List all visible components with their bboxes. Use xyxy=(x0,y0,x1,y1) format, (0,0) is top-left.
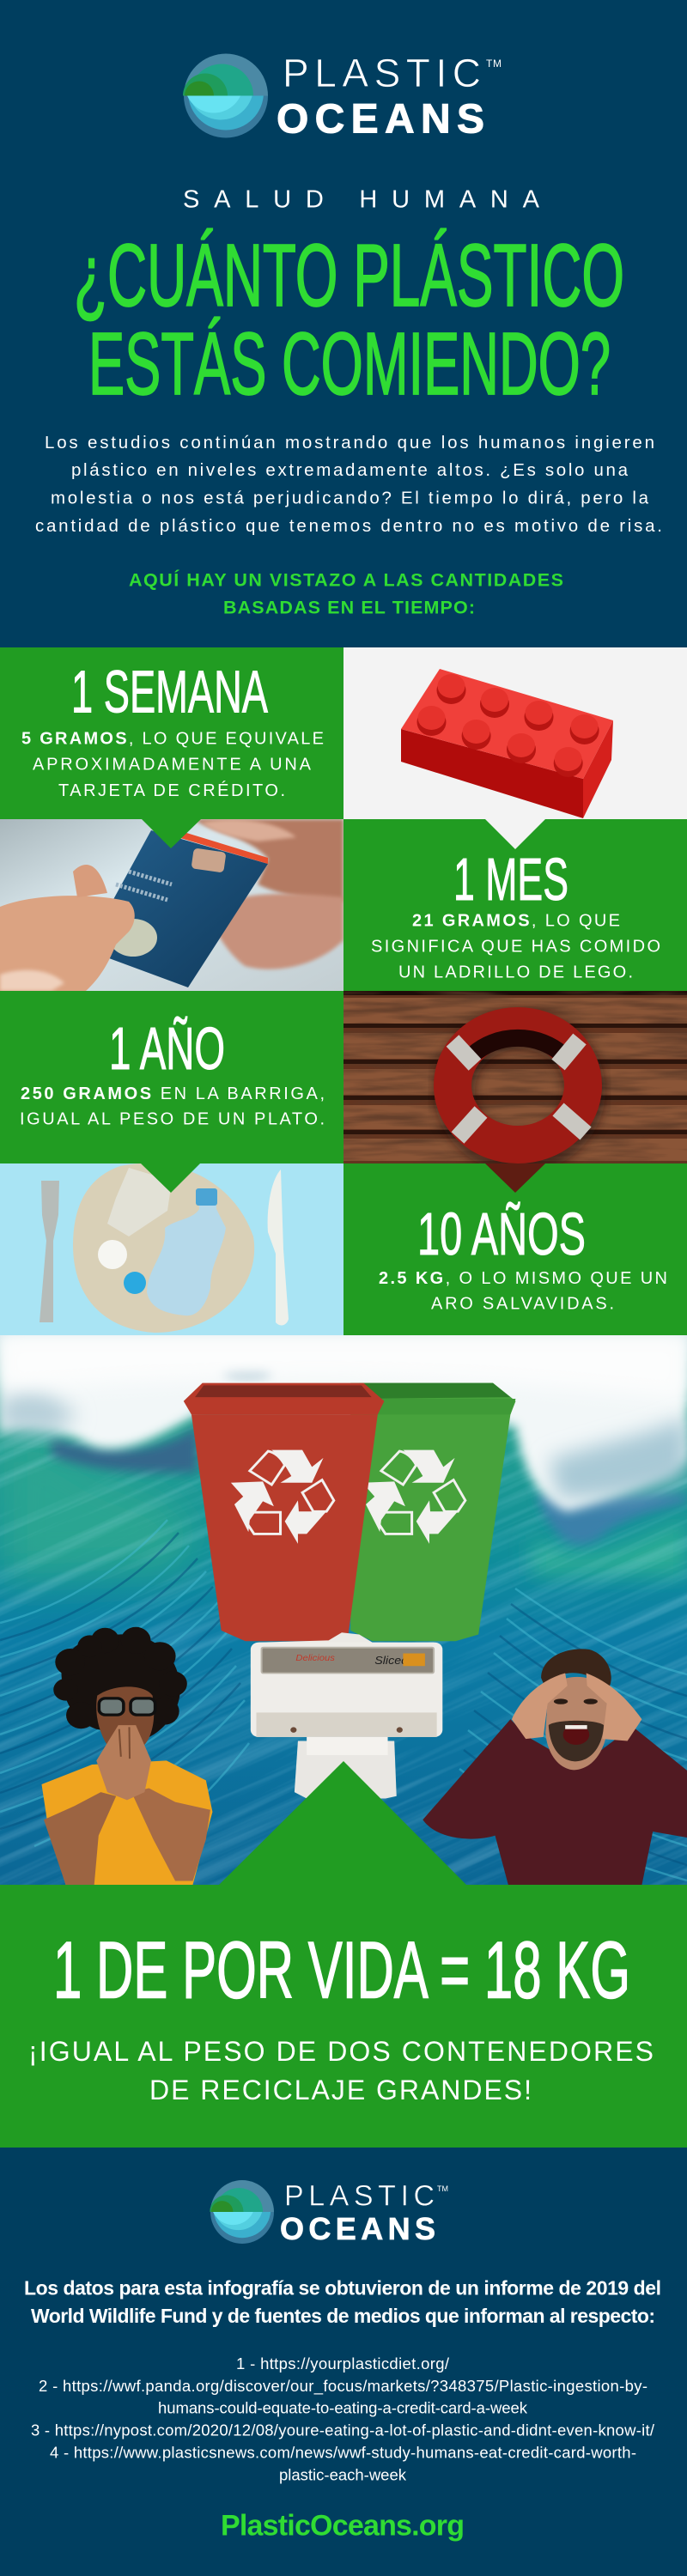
body xyxy=(379,1269,667,1314)
intro text: plástico en niveles extremadamente altos. ¿Es solo una xyxy=(71,460,629,480)
left hand xyxy=(0,896,135,991)
heading: 1 AÑO xyxy=(109,1015,225,1082)
source links: 2 - https://wwf.panda.org/discover/our_focus/markets/?348375/Plastic-ingestion-by- xyxy=(39,2377,647,2396)
knife xyxy=(268,1170,289,1325)
man xyxy=(423,1649,687,1885)
subheading: AQUÍ HAY UN VISTAZO A LAS CANTIDADES xyxy=(129,568,563,591)
logo: Plastic Oceans xyxy=(183,51,502,143)
heading: 1 MES xyxy=(453,846,568,913)
title xyxy=(74,226,624,413)
panel: 10 años xyxy=(344,1163,687,1335)
body: TARJETA DE CRÉDITO. xyxy=(58,781,285,800)
logo wordmark: OCEANS xyxy=(277,96,484,143)
body: ¡IGUAL AL PESO DE DOS CONTENEDORES xyxy=(28,2036,654,2067)
heading: 1 SEMANA xyxy=(71,658,268,725)
photo: lego brick xyxy=(344,647,687,819)
neck and head xyxy=(545,1677,607,1770)
body: 2.5 KG, O LO MISMO QUE UN xyxy=(379,1269,667,1288)
body: IGUAL AL PESO DE UN PLATO. xyxy=(20,1109,325,1128)
notch xyxy=(142,819,201,848)
mouth xyxy=(563,1724,589,1745)
red bin xyxy=(184,1383,384,1641)
green triangle xyxy=(219,1761,466,1885)
wave strands xyxy=(0,1520,687,1880)
notch xyxy=(141,1163,200,1193)
logo: Plastic Oceans small xyxy=(210,2179,448,2246)
hands xyxy=(512,1673,568,1739)
data source text xyxy=(24,2277,661,2327)
plate xyxy=(73,1163,254,1333)
eyes xyxy=(554,1698,598,1704)
body: DE RECICLAJE GRANDES! xyxy=(149,2075,532,2105)
panel: 1 año xyxy=(0,991,344,1193)
logo wordmark: PLASTIC xyxy=(283,51,481,95)
source links: 4 - https://www.plasticsnews.com/news/wwf-study-humans-eat-credit-card-worth- xyxy=(50,2444,636,2461)
source links xyxy=(31,2354,655,2483)
hair xyxy=(541,1649,611,1698)
shirt xyxy=(41,1760,212,1885)
subheading xyxy=(129,568,563,618)
panel: 1 semana xyxy=(0,647,344,848)
notch xyxy=(485,819,545,849)
photo: plate with plastic xyxy=(0,1163,344,1335)
header background xyxy=(0,0,687,647)
website: PlasticOceans.org xyxy=(221,2509,465,2542)
panel: footer xyxy=(26,2180,660,2542)
body: SIGNIFICA QUE HAS COMIDO xyxy=(371,938,660,957)
card xyxy=(110,830,268,987)
slicer machine: Delicious xyxy=(295,1653,336,1663)
bottle xyxy=(147,1206,226,1315)
icon: recycle xyxy=(362,1450,465,1544)
data source text: Los datos para esta infografía se obtuvieron de un informe de 2019 del xyxy=(24,2277,661,2300)
body: 250 GRAMOS EN LA BARRIGA, xyxy=(21,1084,325,1103)
notch xyxy=(485,1163,545,1193)
hair xyxy=(53,1627,187,1739)
subheading: BASADAS EN EL TIEMPO: xyxy=(223,598,475,618)
sweater xyxy=(423,1719,687,1885)
bins and slicer xyxy=(41,1383,687,1885)
hands xyxy=(96,1725,151,1800)
source links: 3 - https://nypost.com/2020/12/08/youre-eating-a-lot-of-plastic-and-didnt-even-know-it/ xyxy=(31,2421,655,2439)
body xyxy=(371,912,660,982)
panel: lifetime total xyxy=(0,1885,687,2148)
body: 5 GRAMOS, LO QUE EQUIVALE xyxy=(21,730,324,749)
source links: humans-could-equate-to-eating-a-credit-card-a-week xyxy=(158,2399,528,2416)
beard xyxy=(549,1721,604,1761)
body: ARO SALVAVIDAS. xyxy=(431,1295,614,1314)
source links: 1 - https://yourplasticdiet.org/ xyxy=(236,2354,450,2372)
crumpled cup xyxy=(107,1168,172,1236)
body: APROXIMADAMENTE A UNA xyxy=(33,756,312,775)
body xyxy=(21,730,324,800)
data source text: World Wildlife Fund y de fuentes de medios que informan al respecto: xyxy=(31,2305,655,2327)
chip circle xyxy=(109,919,157,957)
logo wordmark xyxy=(277,51,502,143)
source links: plastic-each-week xyxy=(279,2466,407,2483)
intro text xyxy=(35,433,662,536)
woman xyxy=(41,1627,212,1885)
slicer machine xyxy=(251,1632,442,1798)
body: UN LADRILLO DE LEGO. xyxy=(398,963,633,982)
intro text: Los estudios continúan mostrando que los humanos ingieren xyxy=(45,433,654,453)
slicer machine: Sliced xyxy=(374,1655,409,1667)
fork xyxy=(40,1181,59,1322)
heading: 10 AÑOS xyxy=(417,1200,586,1267)
glasses xyxy=(99,1698,155,1715)
intro text: molestia o nos está perjudicando? El tiempo lo dirá, pero la xyxy=(51,488,649,508)
panel: 1 mes xyxy=(344,819,687,991)
logo: Plastic Oceans small: OCEANS xyxy=(280,2211,435,2246)
icon: ocean disc xyxy=(183,53,268,137)
kicker: salud humana: SALUD HUMANA xyxy=(183,185,540,213)
icon: recycle xyxy=(231,1450,334,1544)
logo: Plastic Oceans small: PLASTIC xyxy=(284,2179,435,2212)
intro text: cantidad de plástico que tenemos dentro no es motivo de risa. xyxy=(35,516,662,536)
arms xyxy=(44,1792,116,1885)
body: 21 GRAMOS, LO QUE xyxy=(412,912,620,931)
face xyxy=(96,1686,154,1749)
logo wordmark: TM xyxy=(486,58,502,70)
body xyxy=(28,2036,654,2105)
green bin xyxy=(350,1383,516,1641)
body xyxy=(20,1084,325,1128)
photo: life ring on wood xyxy=(344,991,687,1163)
logo: Plastic Oceans small: TM xyxy=(437,2184,448,2193)
right hand xyxy=(193,819,344,902)
blue cap xyxy=(124,1272,146,1294)
photo: ocean wave background xyxy=(0,1335,687,1885)
white cap xyxy=(98,1240,127,1269)
photo: credit card xyxy=(0,819,344,991)
